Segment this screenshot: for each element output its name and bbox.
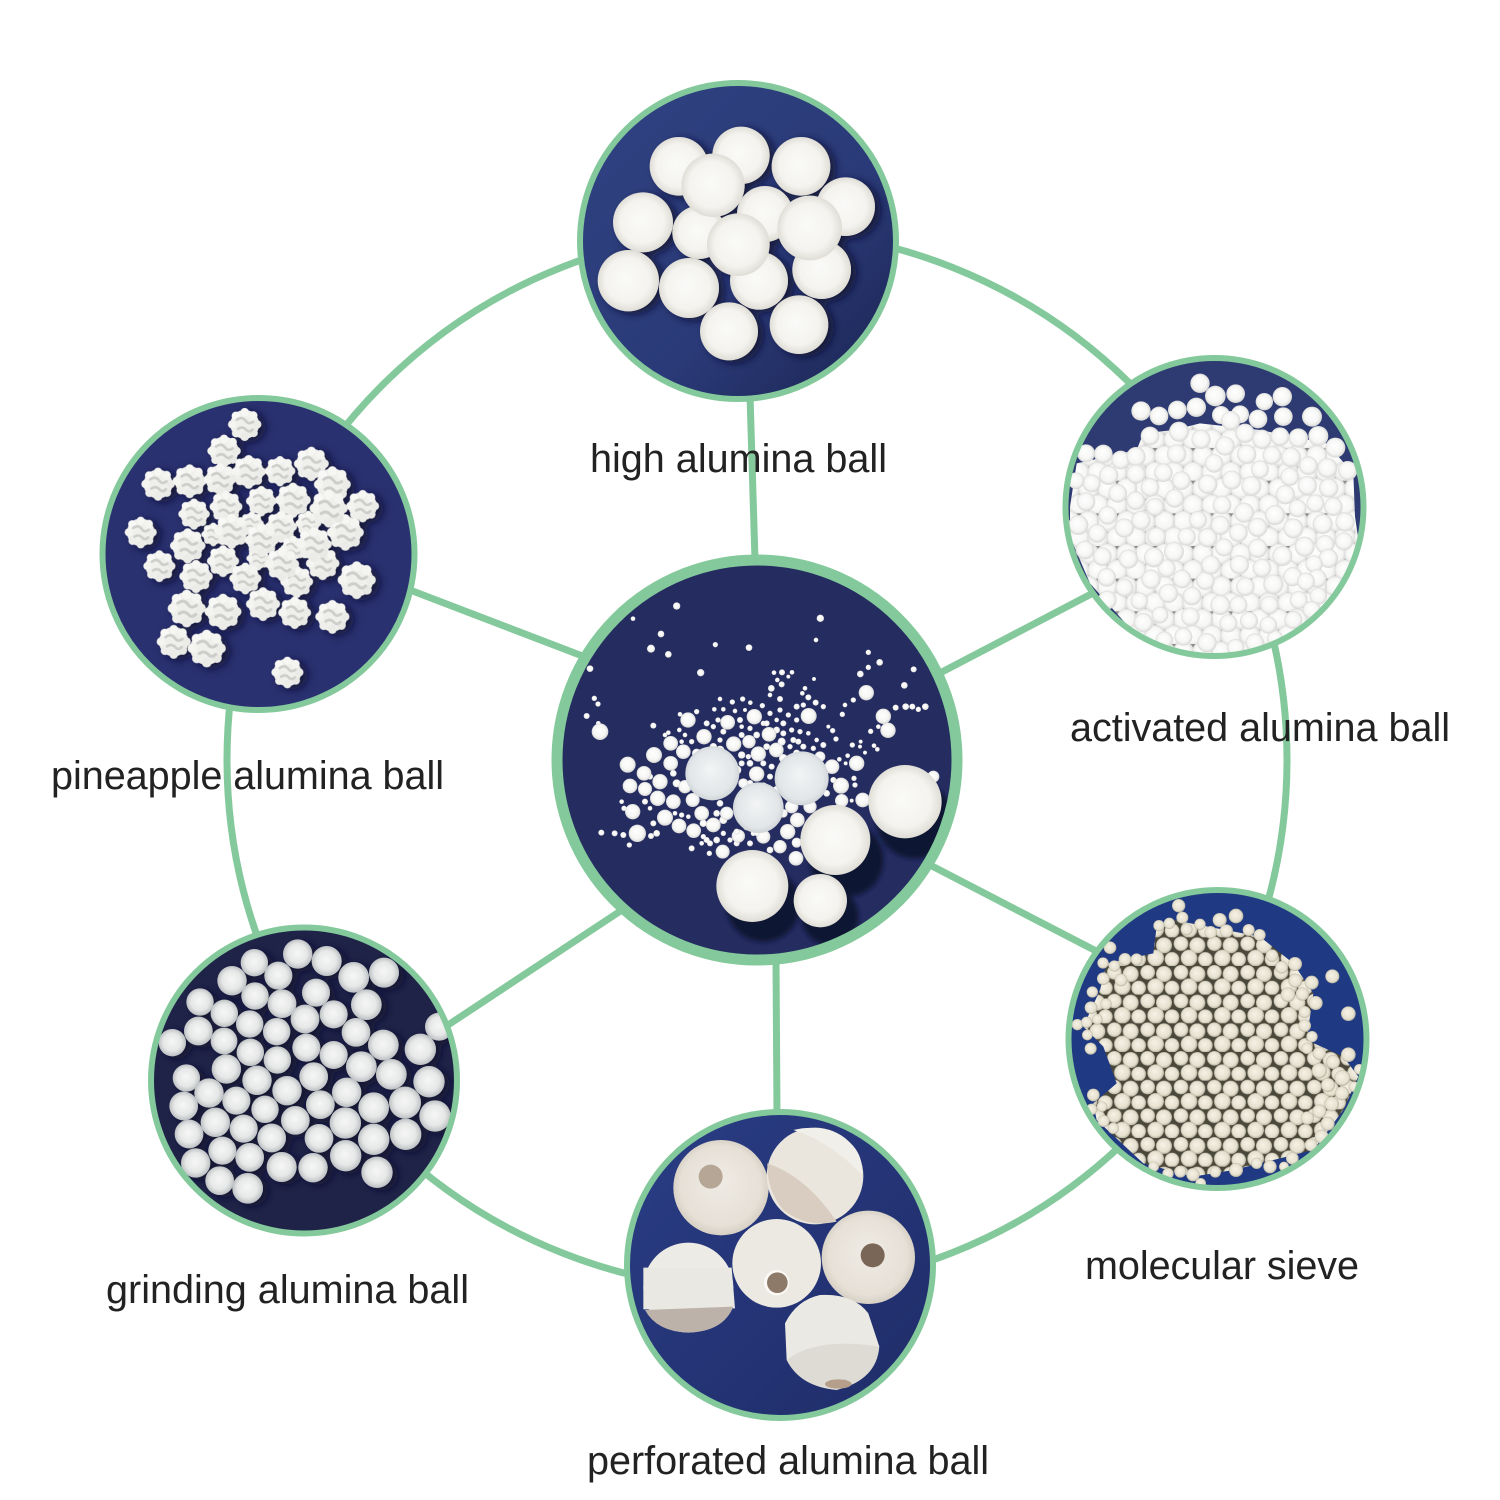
panel: central mixed alumina balls photo [557,560,957,960]
label: activated alumina ball: activated alumina ball [1070,706,1450,750]
connecting network: outer ring and spokes [227,230,1287,1290]
panel: grinding alumina ball photo [151,928,457,1234]
panel: pineapple alumina ball photo [102,398,414,710]
ball with hole, right [822,1211,915,1304]
ball with hole, top left [673,1140,769,1235]
ball with small hole, centre [732,1219,821,1308]
panel: activated alumina ball photo [1066,358,1364,660]
panel: perforated alumina ball photo [627,1112,933,1418]
panel: high alumina ball photo [580,83,896,399]
label: high alumina ball: high alumina ball [590,437,887,481]
label: grinding alumina ball: grinding alumina ball [106,1268,469,1312]
ball with cut caps, top [767,1128,863,1224]
label: molecular sieve: molecular sieve [1085,1244,1359,1288]
label: perforated alumina ball: perforated alumina ball [587,1439,989,1483]
label: pineapple alumina ball: pineapple alumina ball [51,754,444,798]
ball with cut cap and hole, bottom [785,1295,879,1390]
ball with cut band, left [643,1243,735,1333]
panel: molecular sieve photo [1068,890,1366,1189]
